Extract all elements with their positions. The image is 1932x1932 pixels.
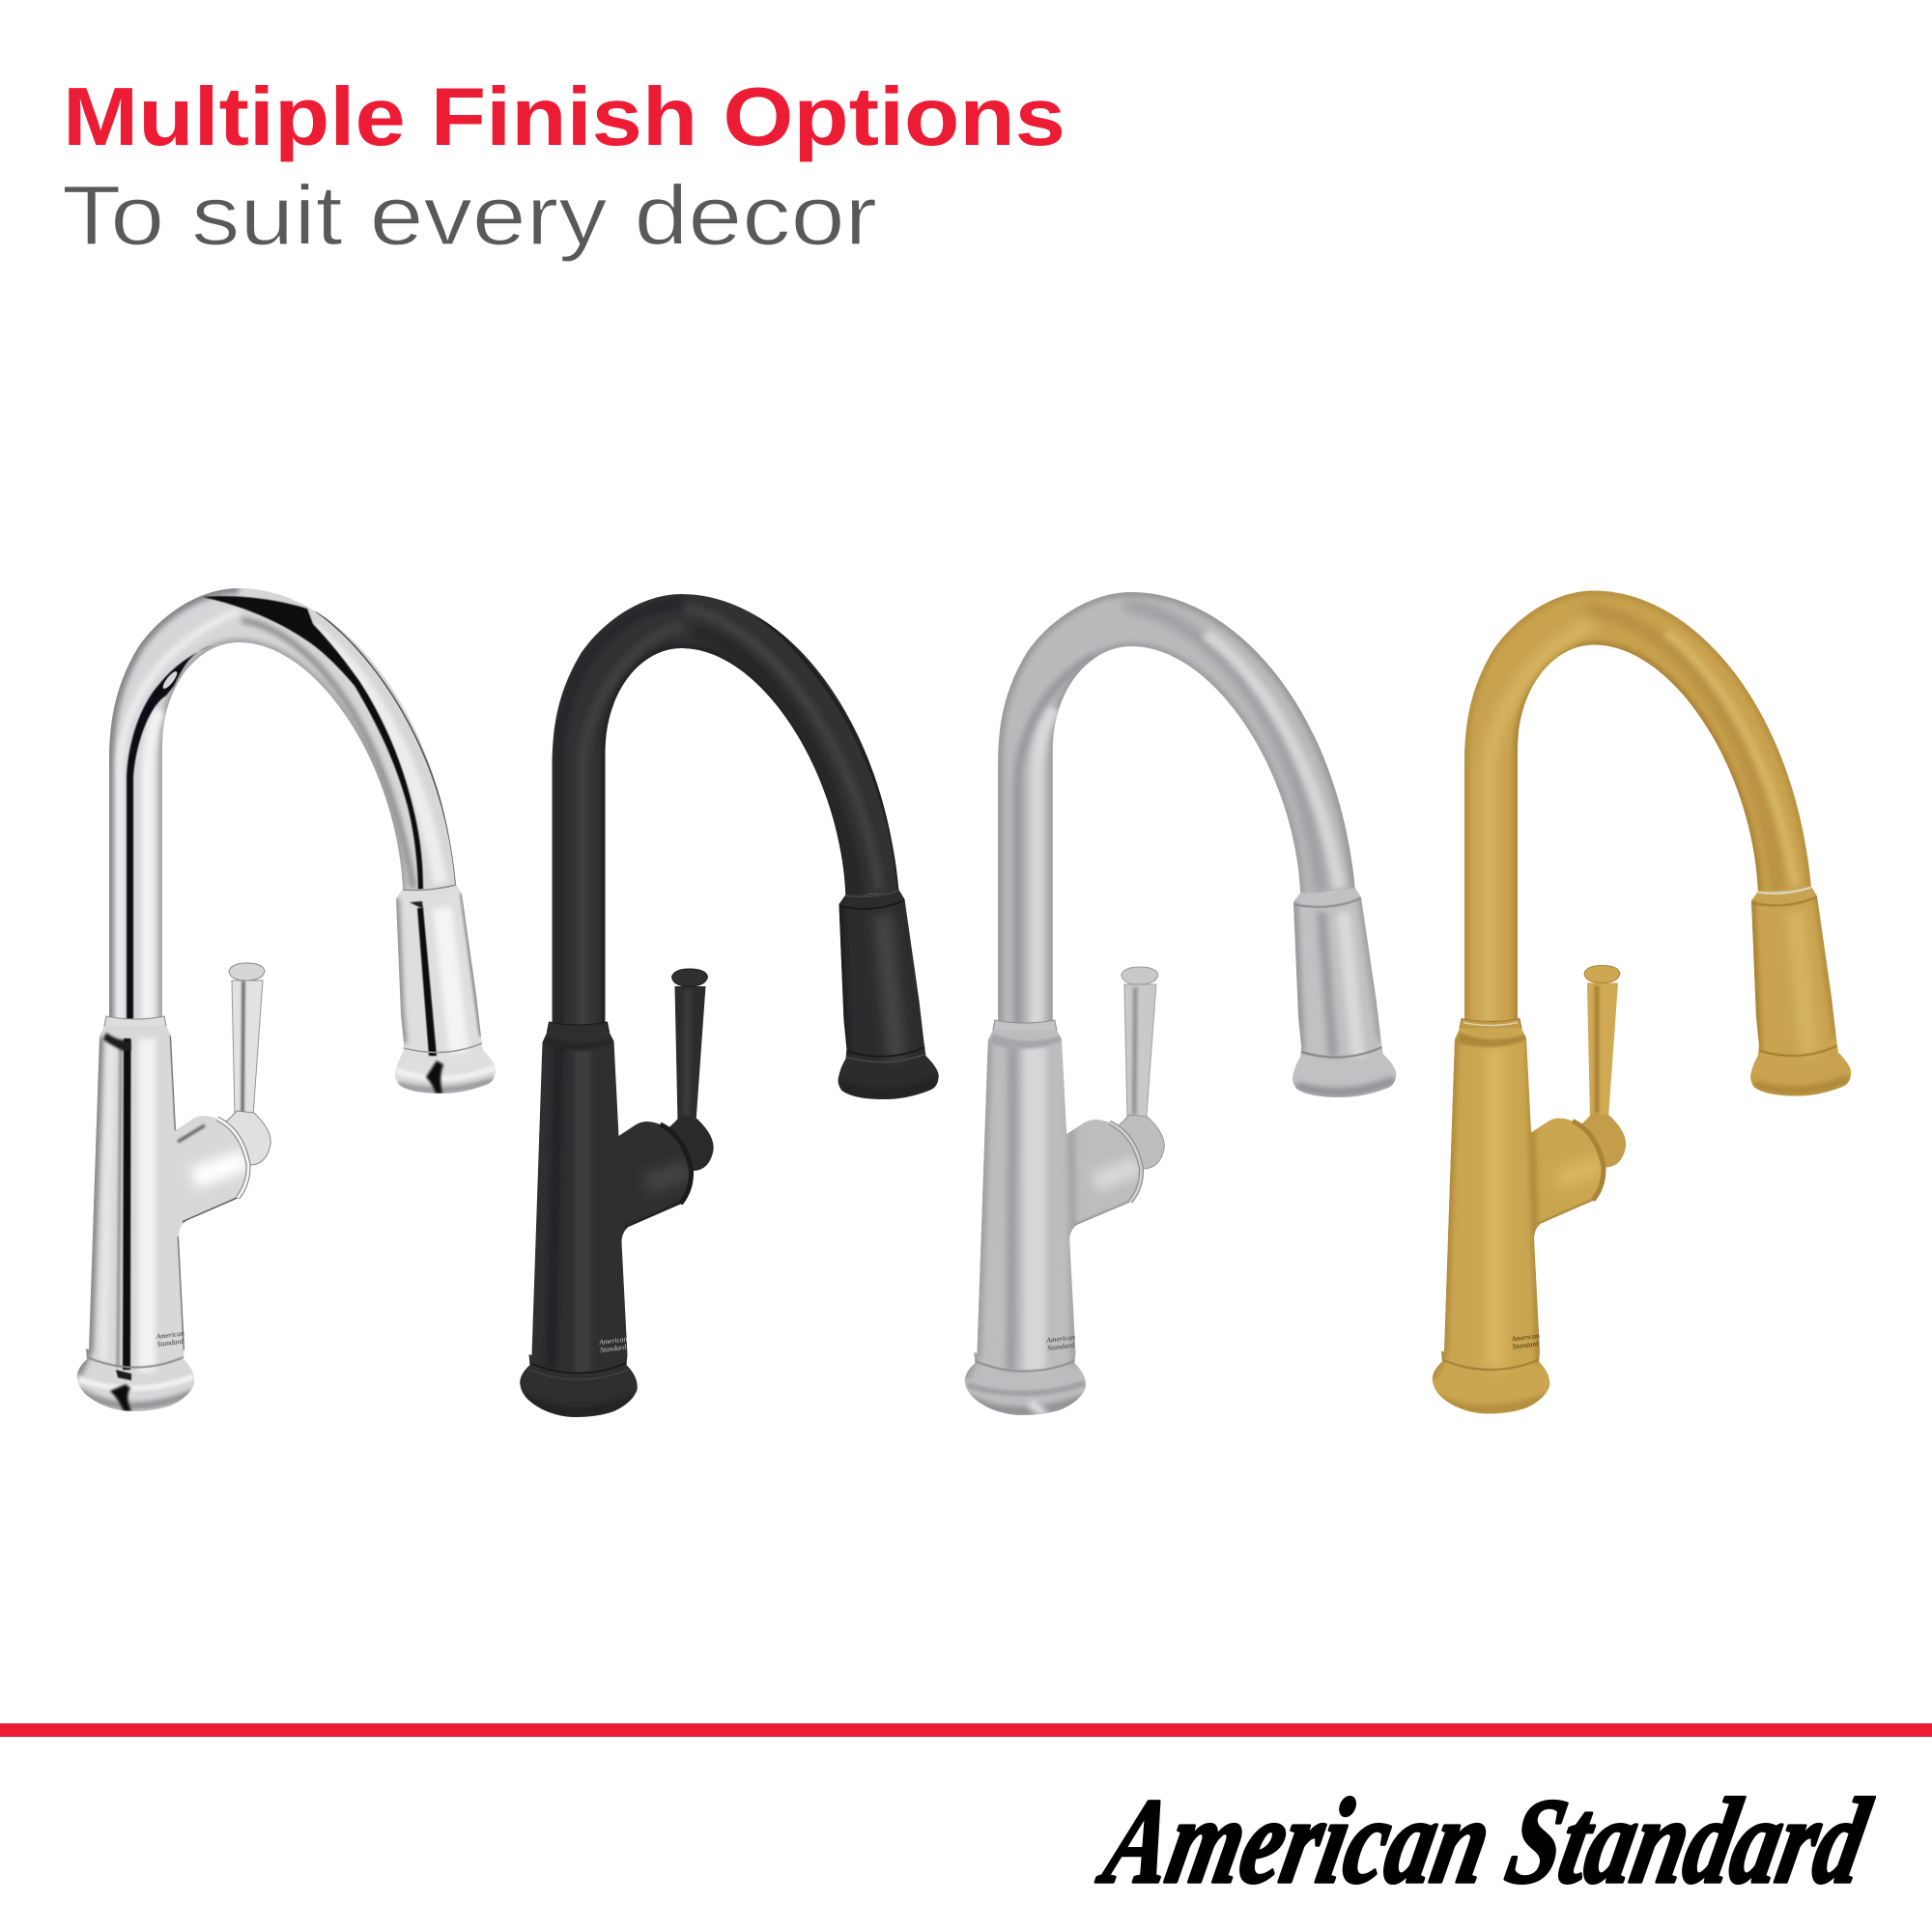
lever [232,980,263,1116]
lever cap [1584,966,1620,983]
body and hub [1432,1028,1602,1414]
hub ring [1109,1122,1141,1202]
faucet: polished chrome [77,588,497,1411]
base logo: American [1511,1331,1540,1343]
hub ring [1573,1121,1604,1200]
spout [998,592,1355,1022]
faucet: matte black [520,594,939,1417]
lever cap [1122,967,1158,984]
handle ball [1118,1115,1164,1169]
hub ring [661,1124,692,1204]
spray head [838,890,939,1099]
body and hub [77,1026,245,1411]
handle ball [668,1117,714,1171]
lever cap [229,963,265,980]
base logo: American [599,1334,628,1347]
base logo: Standard [156,1337,184,1349]
spout [553,594,898,1024]
spray head [1293,888,1397,1097]
body and hub [964,1030,1139,1415]
base logo: Standard [600,1343,627,1354]
lever cap [672,969,707,986]
title: Multiple Finish Options [63,71,1065,163]
neck collar [993,1020,1057,1034]
spray head [395,884,497,1094]
body and hub [520,1032,690,1417]
handle ball [225,1111,270,1165]
faucet: brushed nickel [964,592,1397,1415]
hub ring [217,1119,248,1198]
red divider bar [0,1723,1932,1737]
neck collar [104,1016,166,1030]
spout [1464,591,1811,1021]
lever [674,986,705,1122]
base logo: Standard [1512,1339,1539,1350]
spout [109,588,456,1018]
neck collar [1460,1018,1521,1032]
base logo: American [1046,1333,1076,1345]
spray head [1750,887,1851,1095]
lever [1124,984,1156,1120]
lever [1587,983,1618,1119]
handle ball [1580,1113,1626,1167]
subtitle: To suit every decor [62,169,877,263]
neck collar [547,1022,609,1036]
base logo: Standard [1047,1341,1075,1352]
faucet: brushed gold [1432,591,1851,1414]
base logo: American [156,1328,185,1341]
